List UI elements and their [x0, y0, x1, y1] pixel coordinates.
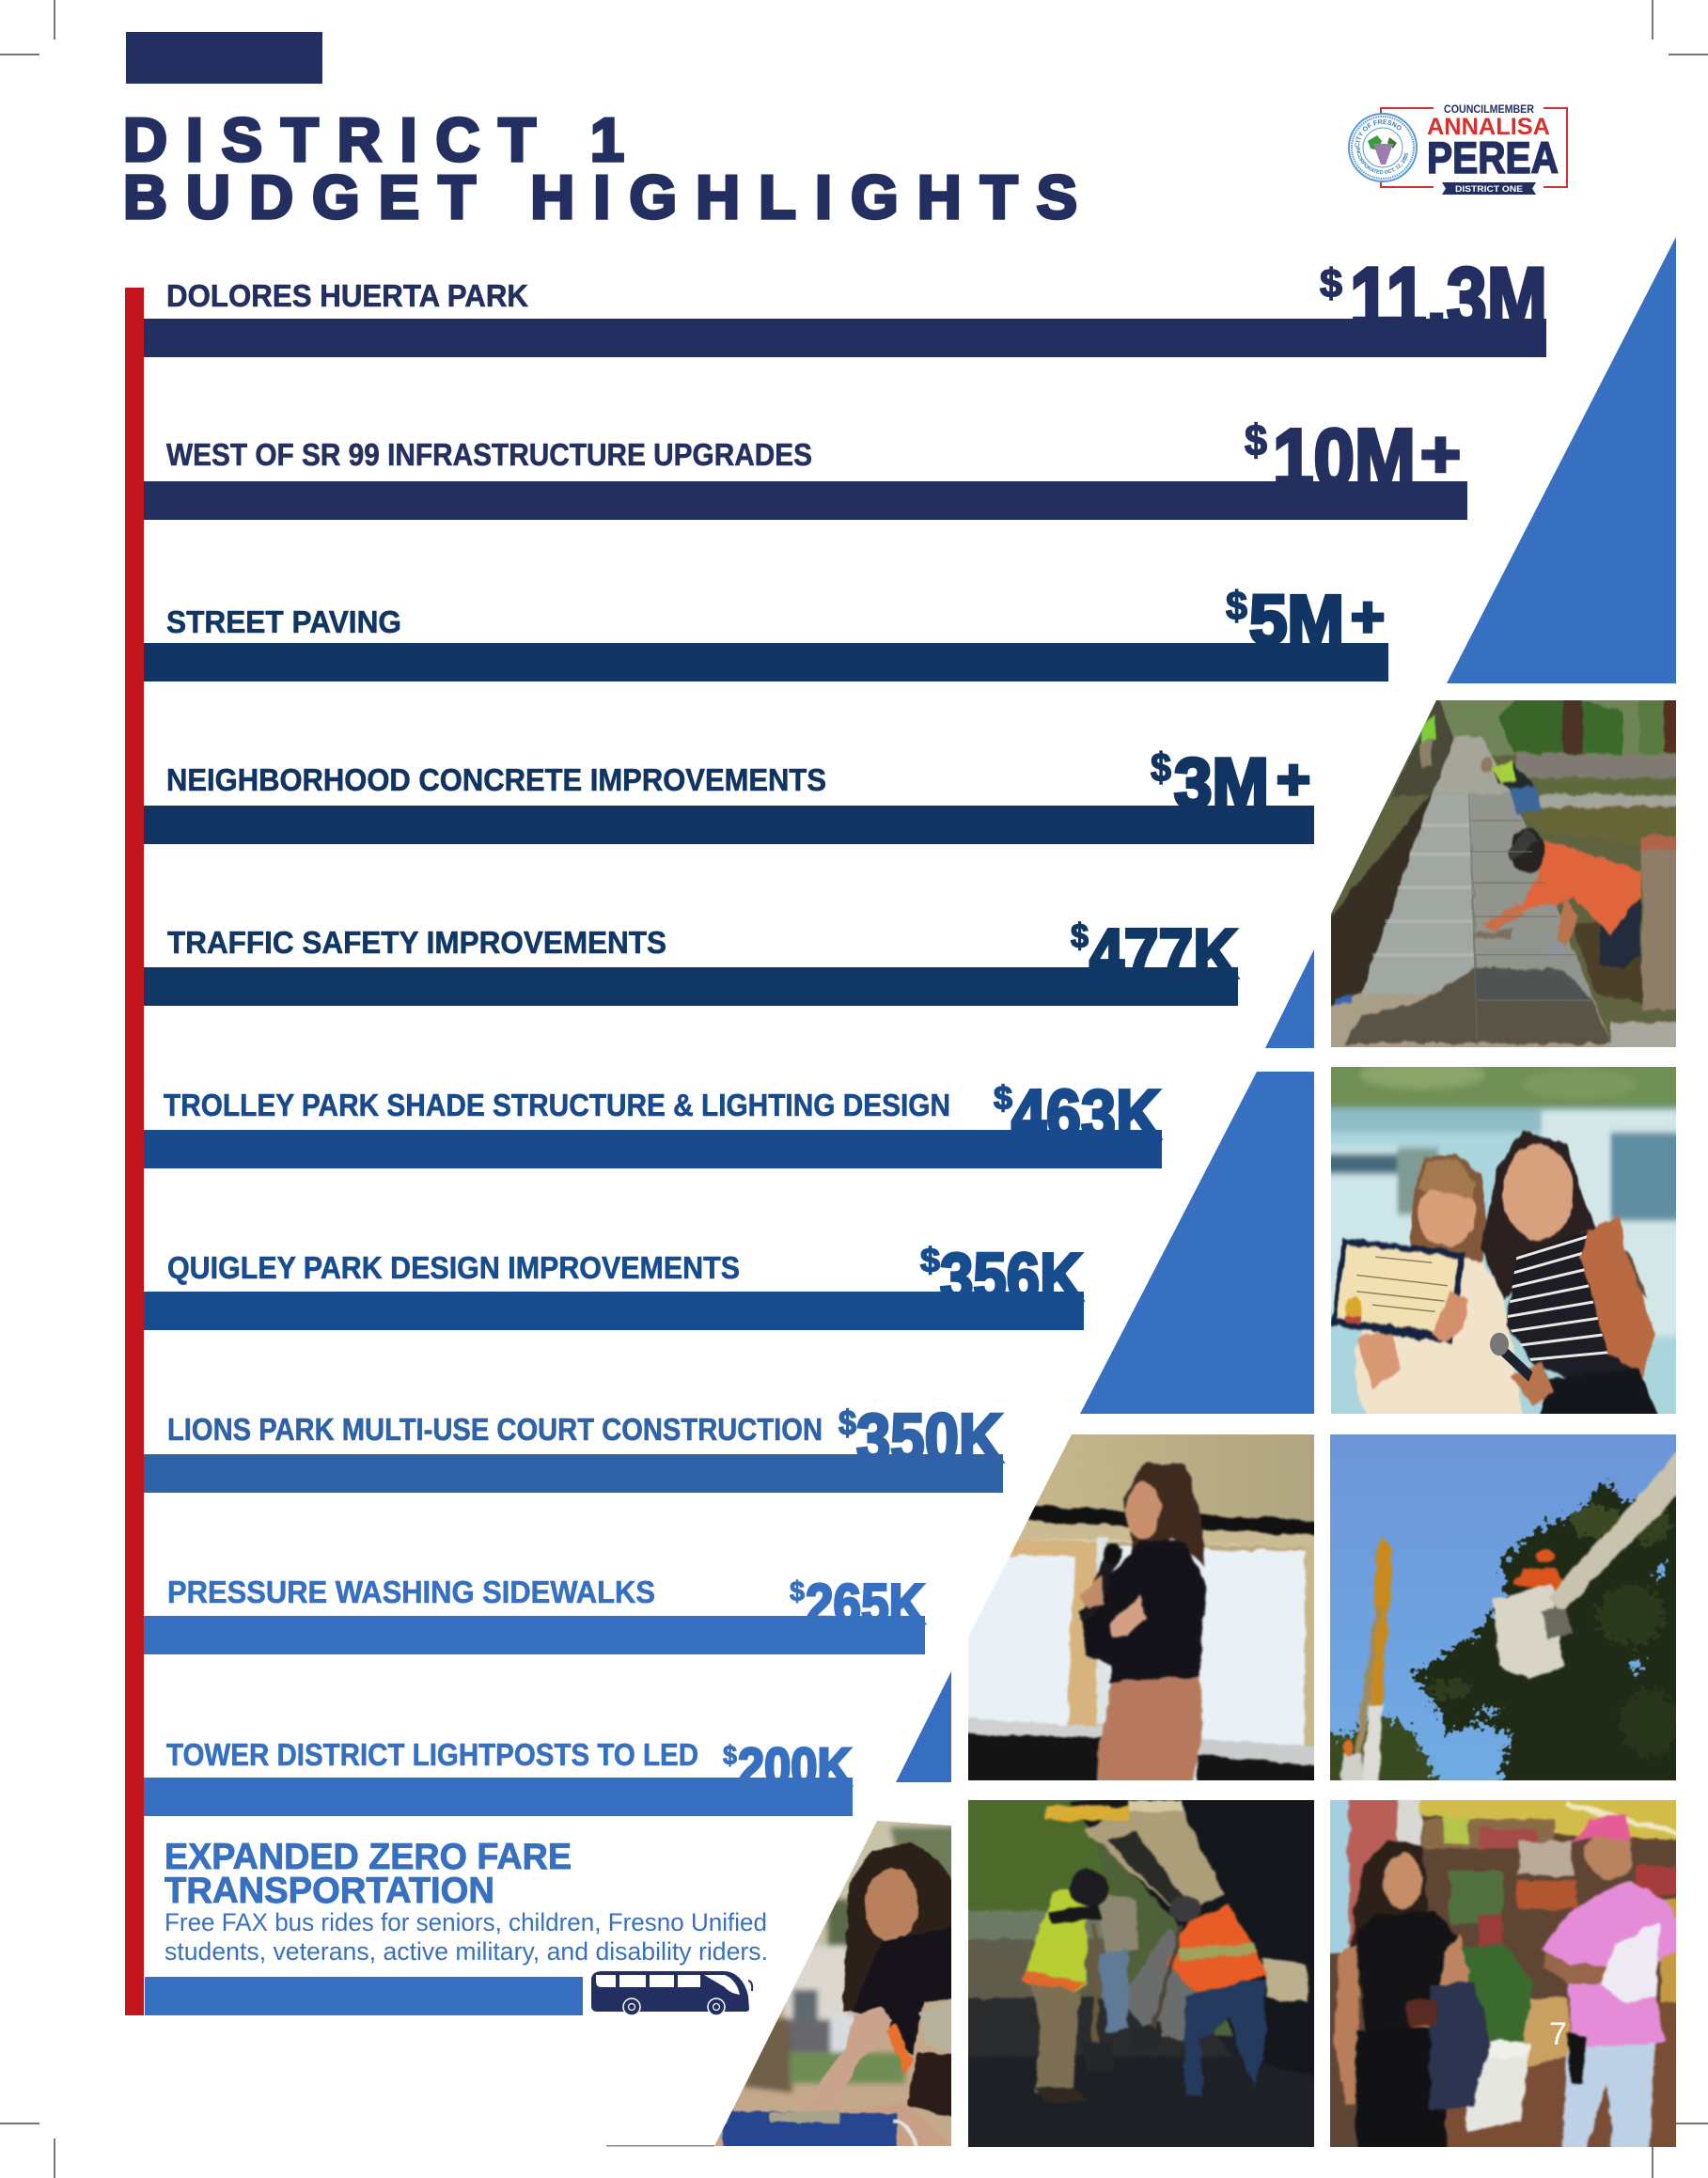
logo: councilmember annalisa perea [1348, 104, 1568, 195]
page number: 7 [1549, 2016, 1567, 2052]
zero fare transportation block: students, veterans, active military, and disability riders. [165, 1937, 768, 1966]
shirt stripes [1508, 1235, 1609, 1361]
big blue triangle, top right [1447, 237, 1676, 683]
row: Lions Park: $ [838, 1403, 856, 1442]
row: Trolley Park: 463K [1011, 1075, 1161, 1153]
logo: councilmember annalisa perea: DISTRICT ONE [1455, 184, 1523, 195]
row: Tower District: $ [723, 1741, 737, 1771]
row: Pressure Washing: $ [790, 1576, 805, 1607]
row: Lions Park: LIONS PARK MULTI-USE COURT CONSTRUCTION [167, 1412, 823, 1447]
row: Quigley Park [144, 1241, 1084, 1330]
row: Dolores Huerta Park [144, 251, 1547, 357]
small blue triangle [1265, 949, 1314, 1048]
row: Traffic Safety: 477K [1089, 915, 1238, 993]
sidewalk seams [1372, 794, 1595, 1046]
tree foliage [1322, 1481, 1689, 1797]
row: Neighborhood Concrete [144, 744, 1314, 844]
title: DISTRICT 1 [123, 105, 624, 174]
photo: workers finishing concrete sidewalk [1331, 700, 1676, 1047]
row: Trolley Park [144, 1075, 1162, 1168]
row: Street Paving: STREET PAVING [166, 604, 401, 639]
row: Lions Park: 350K [856, 1401, 1003, 1477]
logo: councilmember annalisa perea: PEREA [1427, 133, 1559, 182]
row: West of SR 99: WEST OF SR 99 INFRASTRUCTURE UPGRADES [166, 437, 812, 472]
row: Trolley Park: $ [994, 1080, 1012, 1117]
title: BUDGET HIGHLIGHTS [123, 163, 1077, 231]
photo: bucket truck worker trimming tree [1330, 1434, 1676, 1780]
row: Quigley Park: $ [920, 1241, 940, 1279]
row: West of SR 99: + [1420, 417, 1461, 491]
row: Traffic Safety [144, 915, 1238, 1006]
row: Traffic Safety: $ [1071, 917, 1089, 955]
photo: councilmember with shop owner [1330, 1800, 1676, 2147]
row: Tower District: 200K [738, 1737, 852, 1797]
row: Dolores Huerta Park: $ [1320, 261, 1342, 306]
row: Dolores Huerta Park: DOLORES HUERTA PARK [166, 278, 528, 313]
logo: councilmember annalisa perea: INCORPORATED OCT. 12, 1885 [1356, 148, 1408, 174]
title [123, 105, 1077, 231]
row: Neighborhood Concrete: 3M [1174, 744, 1269, 823]
photo: two women with certificate [1331, 1067, 1676, 1414]
row: Street Paving: + [1351, 586, 1385, 649]
icon: bus [591, 1971, 752, 2015]
zero fare transportation block: Free FAX bus rides for seniors, children, Fresno Unified [165, 1908, 767, 1936]
row: Neighborhood Concrete: NEIGHBORHOOD CONCRETE IMPROVEMENTS [166, 762, 826, 797]
photo: road crew laying asphalt [968, 1800, 1314, 2147]
zero fare transportation block [145, 1837, 768, 2015]
row: Tower District [144, 1737, 853, 1816]
row: Lions Park [144, 1401, 1003, 1493]
row: West of SR 99: $ [1245, 415, 1267, 464]
row: Street Paving: $ [1226, 584, 1247, 629]
row: Quigley Park: 356K [940, 1241, 1083, 1315]
row: Pressure Washing [144, 1573, 925, 1654]
certificate text lines [1356, 1257, 1448, 1311]
photo: councilmember at community event [714, 1821, 951, 2146]
row: Pressure Washing: PRESSURE WASHING SIDEWALKS [167, 1575, 655, 1609]
row: Dolores Huerta Park: 11.3M [1350, 251, 1547, 346]
row: Neighborhood Concrete: $ [1151, 745, 1171, 791]
row: Street Paving: 5M [1249, 581, 1344, 659]
row: Trolley Park: TROLLEY PARK SHADE STRUCTURE & LIGHTING DESIGN [164, 1088, 950, 1122]
row: Tower District: TOWER DISTRICT LIGHTPOSTS TO LED [166, 1737, 698, 1772]
small blue triangle, lower [896, 1671, 951, 1782]
row: West of SR 99: 10M [1273, 413, 1416, 504]
photo: councilmember speaking with microphone [968, 1434, 1314, 1780]
photo base line [606, 2145, 714, 2147]
zero fare transportation block: EXPANDED ZERO FARE [165, 1837, 572, 1877]
logo: councilmember annalisa perea: COUNCILMEMBER [1444, 104, 1535, 116]
header block [126, 32, 322, 84]
row: West of SR 99 [144, 413, 1467, 520]
zero fare transportation block: TRANSPORTATION [165, 1871, 494, 1911]
red vertical axis [125, 288, 144, 2015]
row: Neighborhood Concrete: + [1277, 748, 1310, 811]
row: Quigley Park: QUIGLEY PARK DESIGN IMPROVEMENTS [167, 1250, 740, 1285]
tall blue triangle [1080, 1072, 1314, 1414]
row: Traffic Safety: TRAFFIC SAFETY IMPROVEMENTS [167, 925, 666, 960]
row: Street Paving [144, 581, 1388, 682]
row: Pressure Washing: 265K [806, 1573, 925, 1636]
logo: councilmember annalisa perea: ANNALISA [1427, 114, 1550, 140]
logo: councilmember annalisa perea: CITY OF FRESNO [1355, 119, 1402, 148]
